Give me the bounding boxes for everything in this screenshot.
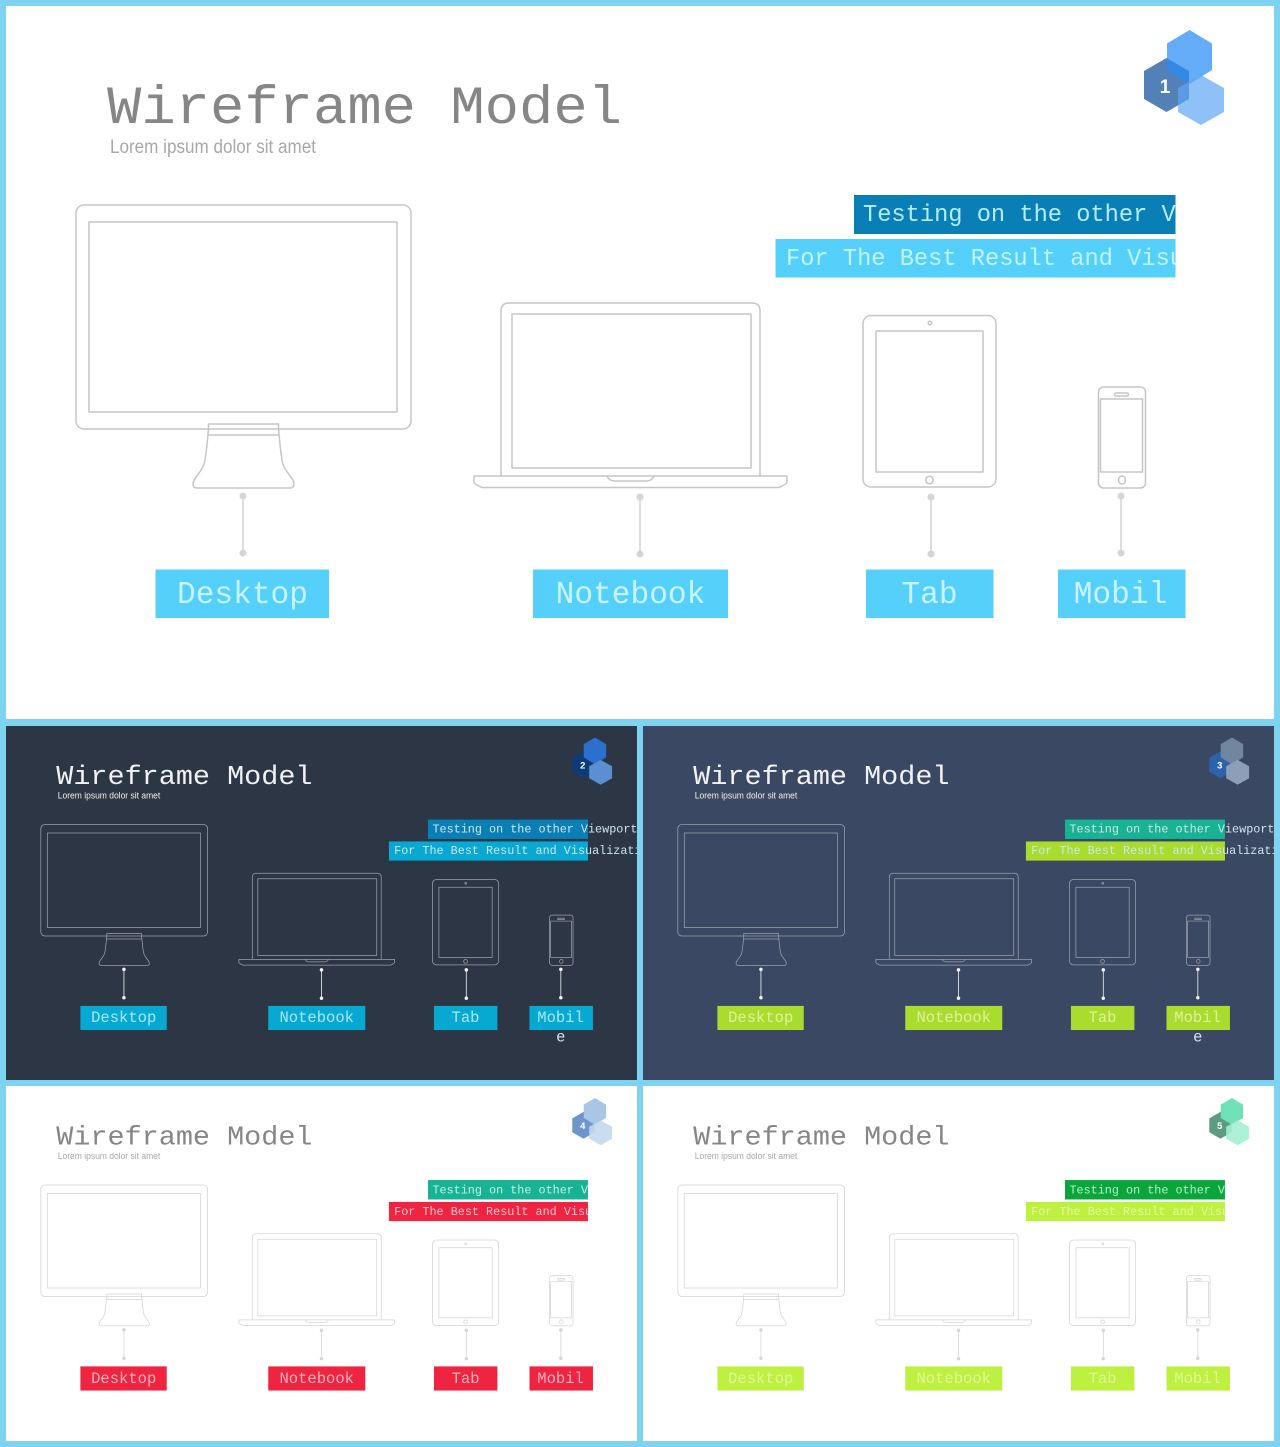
connector: tablet — [465, 1329, 468, 1360]
icon: hexagon badge 4: 4 — [580, 1121, 586, 1132]
connector: tablet — [1102, 968, 1105, 1000]
label: desktop — [80, 1366, 167, 1391]
device: mobile — [550, 915, 573, 965]
label: tab: Tab — [901, 578, 958, 613]
connector: desktop — [122, 968, 126, 999]
bar: testing on the other viewport — [1064, 1180, 1225, 1200]
connector: desktop — [122, 1328, 126, 1360]
icon: hexagon badge 1 — [1144, 30, 1224, 125]
label: notebook — [533, 570, 728, 618]
label: desktop: Desktop — [728, 1009, 793, 1027]
bar: testing on the other viewport — [428, 1180, 588, 1200]
label: tab — [434, 1006, 497, 1030]
bar: testing on the other viewport: Testing on the other Viewport — [432, 1183, 637, 1197]
icon: hexagon badge 4 — [572, 1098, 612, 1145]
device: notebook — [876, 1234, 1032, 1326]
panel: slide 1 white blue — [6, 6, 1274, 719]
device: tablet — [1069, 880, 1136, 965]
connector: notebook — [636, 494, 644, 558]
label: mobile — [529, 1006, 593, 1046]
label: desktop: Desktop — [91, 1009, 156, 1027]
title: Wireframe Model — [56, 763, 313, 793]
panel: slide 3 slate blue — [643, 726, 1280, 1080]
bar: testing on the other viewport — [854, 195, 1176, 234]
label: tab — [1071, 1366, 1134, 1391]
label: mobile — [1058, 570, 1186, 653]
label: notebook — [268, 1366, 365, 1391]
label: notebook: Notebook — [556, 578, 705, 613]
connector: desktop — [240, 492, 246, 556]
connector: notebook — [320, 968, 323, 1000]
device: notebook — [876, 873, 1032, 965]
bar: testing on the other viewport: Testing on the other Viewport — [432, 822, 637, 836]
device: tablet — [432, 880, 499, 965]
connector: notebook — [957, 968, 960, 1000]
label: mobile: e — [1112, 618, 1130, 653]
connector: notebook — [320, 1329, 323, 1360]
subtitle: Lorem ipsum dolor sit amet — [58, 791, 161, 802]
connector: mobile — [1196, 1328, 1200, 1360]
label: notebook — [905, 1366, 1002, 1391]
connector: tablet — [1102, 1329, 1105, 1360]
connector: mobile — [1118, 492, 1124, 556]
connector: mobile — [1196, 968, 1200, 999]
bar: best result and visualization: For The Best Result and Visualization — [394, 1205, 656, 1219]
label: mobile: Mobil — [1174, 1370, 1221, 1388]
bar: best result and visualization — [776, 239, 1176, 278]
connector: desktop — [759, 1328, 763, 1360]
device: desktop — [678, 1185, 845, 1326]
label: notebook: Notebook — [917, 1370, 991, 1388]
label: desktop: Desktop — [91, 1370, 156, 1388]
bar: testing on the other viewport: Testing on the other Viewport — [863, 202, 1275, 229]
connector: notebook — [957, 1329, 960, 1360]
device: mobile — [1098, 387, 1146, 488]
device: notebook — [474, 303, 787, 488]
label: notebook — [268, 1006, 365, 1030]
device: desktop — [41, 825, 208, 965]
label: desktop — [717, 1366, 804, 1391]
label: desktop — [80, 1006, 167, 1030]
bar: best result and visualization — [1026, 1202, 1225, 1222]
bar: best result and visualization — [388, 1202, 588, 1222]
connector: mobile — [559, 968, 563, 999]
subtitle: Lorem ipsum dolor sit amet — [110, 137, 317, 158]
device: tablet — [432, 1240, 499, 1325]
label: tab — [434, 1366, 497, 1391]
connector: tablet — [928, 494, 934, 558]
label: mobile — [529, 1366, 593, 1408]
label: mobile — [1166, 1006, 1230, 1046]
title: Wireframe Model — [107, 79, 622, 140]
connector: mobile — [559, 1328, 563, 1360]
label: desktop — [156, 570, 329, 618]
label: tab: Tab — [1089, 1009, 1117, 1027]
icon: hexagon badge 3: 3 — [1217, 760, 1222, 771]
device: tablet — [863, 316, 996, 487]
panel: slide 5 white green — [643, 1086, 1274, 1441]
label: mobile: Mobil — [537, 1370, 584, 1388]
connector: tablet — [465, 968, 468, 1000]
device: notebook — [239, 1234, 395, 1326]
label: tab — [1071, 1006, 1134, 1030]
label: desktop: Desktop — [177, 578, 308, 613]
device: mobile — [550, 1276, 573, 1326]
label: mobile: Mobil — [1174, 1009, 1221, 1027]
subtitle: Lorem ipsum dolor sit amet — [695, 1151, 798, 1162]
label: tab: Tab — [452, 1370, 480, 1388]
label: notebook: Notebook — [917, 1009, 991, 1027]
label: notebook — [905, 1006, 1002, 1030]
panel: slide 2 dark navy — [6, 726, 656, 1080]
label: mobile: e — [556, 1390, 565, 1408]
device: desktop — [41, 1185, 208, 1326]
label: desktop: Desktop — [728, 1370, 793, 1388]
label: tab: Tab — [1089, 1370, 1117, 1388]
bar: testing on the other viewport: Testing on the other Viewport — [1069, 822, 1274, 836]
subtitle: Lorem ipsum dolor sit amet — [695, 791, 798, 802]
subtitle: Lorem ipsum dolor sit amet — [58, 1151, 161, 1162]
device: mobile — [1187, 1276, 1210, 1326]
label: notebook: Notebook — [280, 1370, 354, 1388]
connector: desktop — [759, 968, 763, 999]
icon: hexagon badge 3 — [1209, 737, 1249, 785]
label: mobile: e — [1193, 1028, 1202, 1046]
device: notebook — [239, 873, 395, 965]
title: Wireframe Model — [693, 1124, 950, 1154]
device: tablet — [1069, 1240, 1136, 1325]
title: Wireframe Model — [56, 1124, 313, 1154]
label: mobile: Mobil — [537, 1009, 584, 1027]
title: Wireframe Model — [693, 763, 950, 793]
icon: hexagon badge 5 — [1209, 1098, 1249, 1145]
label: mobile — [1166, 1366, 1230, 1408]
device: desktop — [678, 825, 845, 965]
label: mobile: e — [1193, 1390, 1202, 1408]
label: mobile: Mobil — [1074, 578, 1167, 613]
device: desktop — [76, 205, 411, 488]
icon: hexagon badge 2 — [572, 737, 612, 785]
label: tab: Tab — [452, 1009, 480, 1027]
label: tab — [866, 570, 994, 618]
bar: testing on the other viewport: Testing on the other Viewport — [1069, 1183, 1274, 1197]
bar: best result and visualization: For The Best Result and Visualization — [394, 844, 656, 858]
label: notebook: Notebook — [280, 1009, 354, 1027]
panel: slide 4 white red — [6, 1086, 637, 1441]
device: mobile — [1187, 915, 1210, 965]
icon: hexagon badge 1: 1 — [1160, 77, 1171, 98]
label: mobile: e — [556, 1028, 565, 1046]
label: desktop — [717, 1006, 804, 1030]
icon: hexagon badge 5: 5 — [1217, 1121, 1222, 1132]
icon: hexagon badge 2: 2 — [580, 760, 585, 771]
